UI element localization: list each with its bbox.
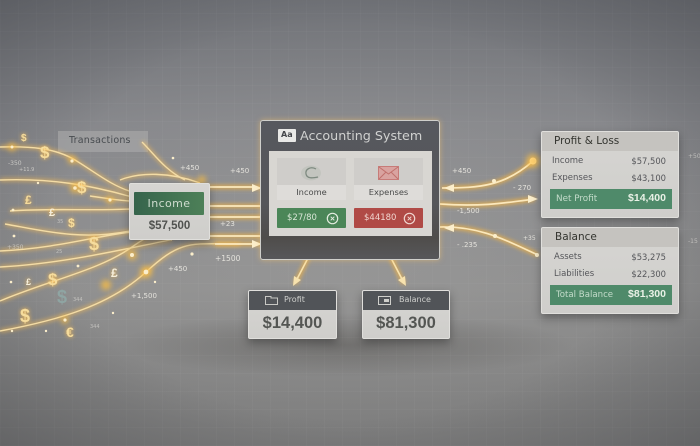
small value labels: -350 — [8, 160, 22, 167]
assets row — [554, 252, 666, 262]
income card — [129, 183, 210, 240]
currency symbols: $ — [77, 178, 87, 197]
income button: $27/80 — [287, 213, 317, 223]
icon: ledger: Aa — [281, 130, 293, 139]
currency symbols: $ — [89, 234, 99, 254]
currency symbols: $ — [21, 133, 27, 144]
icon: folder — [265, 296, 278, 305]
small value labels: +450 — [230, 167, 249, 175]
income row: $57,500 — [631, 156, 666, 166]
icon: coin — [301, 166, 321, 180]
panel: profit and loss — [541, 131, 679, 218]
currency symbols: £ — [49, 207, 55, 219]
small value labels: - 270 — [513, 184, 531, 192]
icon: close circle — [404, 212, 416, 224]
small value labels: +1,500 — [131, 292, 157, 300]
expenses button: $44180 — [364, 213, 396, 223]
right flow arrows — [440, 154, 540, 257]
small value labels: +350 — [7, 244, 24, 251]
currency symbols: £ — [25, 193, 32, 207]
arrows to result cards — [293, 258, 406, 286]
small value labels: +35 — [523, 235, 536, 242]
left incoming lines — [0, 142, 240, 331]
transactions label — [58, 131, 148, 152]
expenses button — [354, 208, 423, 228]
income button — [277, 208, 346, 228]
currency symbols: $ — [68, 216, 75, 230]
inner panel — [269, 151, 432, 236]
lines into accounting system — [200, 184, 262, 248]
assets row: Assets — [554, 252, 582, 262]
small value labels: 25 — [56, 249, 62, 255]
total balance row — [550, 285, 672, 305]
small value labels — [7, 153, 700, 330]
expenses tile — [354, 158, 423, 200]
heading: Accounting System — [300, 128, 422, 143]
small value labels: +23 — [220, 220, 235, 228]
transactions label: Transactions — [69, 135, 131, 146]
liabilities row: $22,300 — [631, 269, 666, 279]
small value labels: -1,500 — [457, 207, 480, 215]
balance header: Balance — [399, 295, 431, 304]
small value labels: - .235 — [457, 241, 477, 249]
small value labels: 344 — [90, 324, 100, 330]
expenses tile: Expenses — [369, 187, 408, 197]
panel: accounting system — [260, 120, 440, 260]
balance card — [362, 290, 450, 339]
heading — [542, 132, 678, 151]
small value labels: +450 — [180, 164, 199, 172]
currency symbols: £ — [111, 266, 118, 280]
income tile: Income — [296, 187, 327, 197]
small value labels: 35 — [57, 219, 63, 225]
net profit row: $14,400 — [628, 192, 666, 204]
small value labels: +450 — [452, 167, 471, 175]
balance value: $81,300 — [376, 314, 436, 332]
small value labels: +11.9 — [19, 167, 34, 173]
small value labels: -15 — [688, 238, 698, 245]
icon: close circle — [326, 212, 338, 224]
muted dollar symbol: $ — [57, 287, 67, 307]
income tile — [277, 158, 346, 200]
expenses row — [552, 173, 666, 183]
profit header: Profit — [284, 295, 305, 304]
currency symbols: € — [66, 324, 74, 340]
expenses row: $43,100 — [631, 173, 666, 183]
small value labels: +1500 — [215, 254, 241, 263]
profit card — [248, 290, 337, 339]
currency symbols — [20, 133, 118, 340]
icon: envelope — [378, 166, 399, 180]
income heading — [134, 192, 204, 215]
liabilities row — [554, 269, 666, 279]
heading: Profit & Loss — [554, 135, 619, 147]
icon: ledger — [278, 129, 296, 142]
small value labels: +450 — [168, 265, 187, 273]
assets row: $53,275 — [631, 252, 666, 262]
profit value: $14,400 — [263, 314, 322, 332]
currency symbols: $ — [40, 143, 50, 162]
glowing nodes — [8, 143, 206, 332]
currency symbols: £ — [26, 277, 31, 287]
liabilities row: Liabilities — [554, 269, 594, 279]
total balance row: $81,300 — [628, 288, 666, 300]
income row — [552, 156, 666, 166]
balance header — [363, 291, 449, 310]
small value labels: 344 — [73, 297, 83, 303]
income value: $57,500 — [149, 220, 190, 232]
profit header — [249, 291, 336, 310]
total balance row: Total Balance — [556, 290, 613, 300]
income row: Income — [552, 156, 583, 166]
panel: balance — [541, 227, 679, 314]
expenses row: Expenses — [552, 173, 592, 183]
currency symbols: $ — [48, 270, 58, 289]
net profit row — [550, 189, 672, 209]
heading: Balance — [555, 231, 597, 243]
income heading: Income — [148, 197, 190, 210]
net profit row: Net Profit — [556, 194, 597, 204]
heading — [542, 228, 678, 247]
icon: wallet — [378, 296, 391, 305]
currency symbols: $ — [20, 306, 30, 326]
